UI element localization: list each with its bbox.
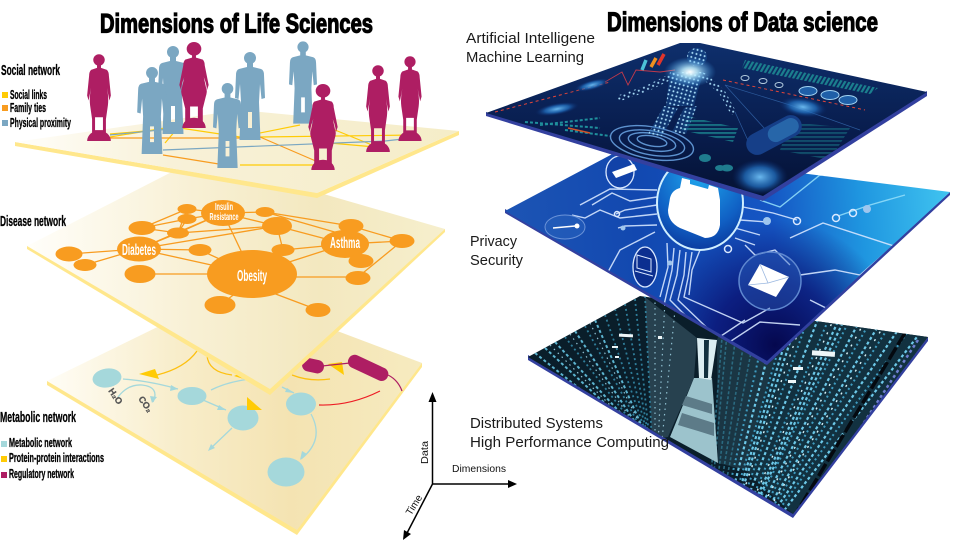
panel: data center plate <box>528 296 928 525</box>
person: woman right <box>366 65 390 152</box>
interface graphics <box>495 48 878 195</box>
far door <box>697 338 717 380</box>
plate face <box>505 150 950 361</box>
swatch: regulatory network <box>1 472 7 478</box>
metabolic arrows <box>118 378 316 459</box>
legend: disease network: Disease network <box>0 213 66 230</box>
swatch: protein-protein interactions <box>1 456 7 462</box>
aisle floor <box>670 378 718 463</box>
chest glow <box>665 58 715 86</box>
legend: social network <box>1 62 71 130</box>
axis lines <box>406 396 512 535</box>
lower left readouts <box>525 118 610 136</box>
swatch: metabolic network <box>1 441 7 447</box>
central shield ring <box>657 156 743 250</box>
label: physical proximity: Physical proximity <box>10 116 71 130</box>
panel: privacy and security plate <box>505 150 950 365</box>
text: distributed systems and high performance computing <box>470 416 669 451</box>
disease nodes <box>56 200 414 317</box>
plate edge <box>528 337 928 518</box>
node label: Insulin Resistance: Resistance <box>210 212 239 223</box>
plate face <box>47 291 422 530</box>
plate face <box>27 158 445 389</box>
lock icon <box>668 178 720 238</box>
thin guide lines <box>725 85 860 145</box>
hatched bar panel top right <box>742 60 878 94</box>
plate face <box>528 296 928 514</box>
aisle vents <box>678 396 714 436</box>
person: woman far right <box>398 56 422 141</box>
legend heading: Social network <box>1 62 60 79</box>
axis label: Dimensions: Dimensions <box>452 464 506 475</box>
axes diagram <box>403 392 517 540</box>
human figure body <box>648 48 707 136</box>
hatched data panel <box>682 116 738 142</box>
label: regulatory network: Regulatory network <box>9 467 74 481</box>
text: privacy and security: Privacy <box>470 234 518 250</box>
map specks <box>699 154 733 172</box>
person: woman back row <box>179 42 209 128</box>
pulse line <box>605 70 675 85</box>
title: Dimensions of Life Sciences: Dimensions of Life Sciences <box>100 8 373 38</box>
circuit traces <box>572 175 910 345</box>
regulatory lines <box>319 363 402 405</box>
text: privacy and security: Security <box>470 253 524 269</box>
text: AI and machine learning: Machine Learning <box>466 50 584 66</box>
person: man centre <box>235 52 265 140</box>
plate face <box>486 43 927 196</box>
small outlined circles <box>741 76 783 88</box>
panel: metabolic network plate <box>47 291 422 535</box>
plate edge <box>47 363 422 535</box>
node label: Insulin Resistance: Insulin <box>215 202 233 213</box>
globe <box>734 160 786 194</box>
molecule label CO2: CO₂ <box>136 394 155 414</box>
panel: disease network plate <box>27 158 445 395</box>
protein interaction triangles <box>139 362 344 410</box>
text: privacy and security <box>470 234 524 269</box>
purple edge dots <box>860 340 919 426</box>
text: distributed systems and high performance computing: Distributed Systems <box>470 416 603 432</box>
node label: Insulin Resistance <box>210 202 239 223</box>
person: man back row <box>158 46 188 134</box>
regulatory network pills <box>301 353 390 383</box>
node label: Asthma: Asthma <box>330 235 360 252</box>
capsule <box>746 115 802 155</box>
legend: metabolic network <box>0 409 104 481</box>
panel: AI plate <box>486 43 927 201</box>
plate edge <box>15 131 459 198</box>
orange readout <box>568 128 590 133</box>
dark rack band <box>798 333 905 510</box>
plate edge <box>27 229 445 395</box>
dimensions axis arrowhead <box>508 480 517 488</box>
laptop icon <box>633 247 657 287</box>
person: man left <box>137 67 167 154</box>
spiral base <box>610 124 694 162</box>
plate face <box>15 110 459 193</box>
swatch: family ties <box>2 105 8 111</box>
human figure dots <box>648 48 707 136</box>
data center racks <box>535 296 928 525</box>
label: metabolic network: Metabolic network <box>9 436 72 450</box>
text: AI and machine learning <box>466 31 595 66</box>
glow blob right <box>782 98 824 116</box>
human figure arms <box>620 76 733 112</box>
filled terminals <box>620 205 871 266</box>
envelope icon <box>739 252 801 310</box>
label: social links: Social links <box>10 88 47 102</box>
protein interaction arrows <box>157 351 330 380</box>
metabolic arrowheads <box>150 385 307 460</box>
circuit terminals <box>614 210 856 252</box>
time axis arrowhead <box>403 530 411 540</box>
label: family ties: Family ties <box>10 101 46 115</box>
social links <box>110 125 415 165</box>
axis label: Time: Time <box>404 493 425 518</box>
person: woman left <box>87 54 111 141</box>
person: woman front <box>308 84 338 170</box>
red dotted lines <box>495 80 865 112</box>
node label: Diabetes: Diabetes <box>122 242 156 259</box>
left blob <box>538 102 576 116</box>
door gap <box>704 340 709 378</box>
title: Dimensions of Data science: Dimensions of Data science <box>607 7 878 37</box>
node label: Obesity: Obesity <box>237 268 267 285</box>
metabolic nodes <box>91 367 316 486</box>
data axis arrowhead <box>428 392 436 402</box>
key icon <box>545 215 585 239</box>
molecule label H2O: H₂O <box>106 386 125 406</box>
dark lower shade <box>505 150 950 361</box>
swatch: physical proximity <box>2 120 8 126</box>
small lock icon <box>606 156 637 188</box>
person: man right back <box>289 41 317 124</box>
left blob <box>576 79 608 91</box>
status circles <box>799 86 857 104</box>
text: AI and machine learning: Artificial Intelligene <box>466 31 595 47</box>
color bars <box>642 54 664 70</box>
person: man front <box>213 83 242 168</box>
plate edge <box>486 91 927 201</box>
plate edge <box>505 192 950 365</box>
panel: social network plate <box>15 41 459 198</box>
hatched side panel <box>780 124 850 158</box>
text: distributed systems and high performance computing: High Performance Computing <box>470 435 669 451</box>
ceiling lights <box>612 334 835 383</box>
legend heading: Metabolic network <box>0 409 76 426</box>
label: protein-protein interactions: Protein-protein interactions <box>9 451 104 465</box>
disease links <box>69 209 402 310</box>
swatch: social links <box>2 92 8 98</box>
axis label: Data: Data <box>420 441 431 464</box>
